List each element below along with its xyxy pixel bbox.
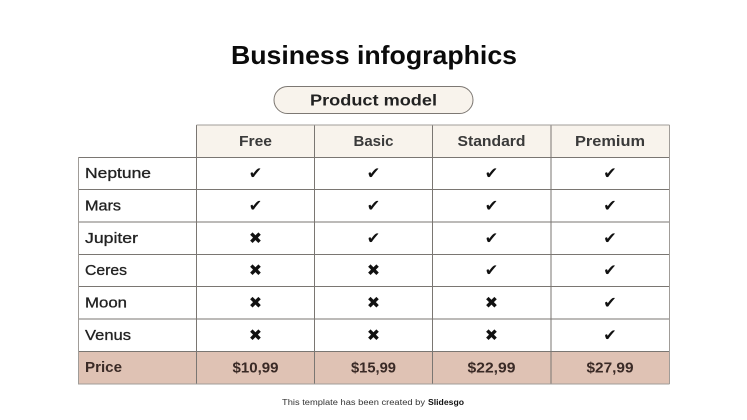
check and cross marks: ✔ bbox=[603, 228, 617, 248]
check and cross marks: ✖ bbox=[367, 326, 380, 344]
check and cross marks: ✖ bbox=[485, 293, 498, 312]
price row: $10,99 bbox=[232, 360, 278, 376]
footer credit: Slidesgo bbox=[428, 398, 464, 407]
pill: product model: Product model bbox=[310, 92, 437, 110]
title: Business infographics bbox=[231, 40, 517, 70]
footer credit bbox=[282, 398, 464, 407]
check and cross marks: ✔ bbox=[249, 196, 262, 215]
pill: product model bbox=[274, 86, 473, 114]
column headers: Premium bbox=[575, 133, 645, 150]
column headers: Basic bbox=[354, 133, 394, 150]
header row background bbox=[196, 125, 669, 157]
check and cross marks: ✔ bbox=[367, 164, 380, 182]
footer credit: This template has been created by bbox=[282, 398, 425, 407]
check and cross marks: ✔ bbox=[367, 196, 380, 215]
check and cross marks: ✔ bbox=[249, 164, 262, 182]
row labels: Ceres bbox=[85, 262, 127, 279]
column headers: Free bbox=[239, 133, 272, 150]
check and cross marks: ✖ bbox=[249, 326, 262, 344]
check and cross marks: ✔ bbox=[485, 196, 498, 215]
check and cross marks: ✔ bbox=[603, 326, 617, 344]
check and cross marks: ✔ bbox=[603, 164, 617, 182]
check and cross marks: ✔ bbox=[485, 164, 498, 182]
check and cross marks: ✔ bbox=[367, 228, 380, 248]
column headers: Standard bbox=[458, 133, 526, 150]
check and cross marks: ✔ bbox=[603, 293, 617, 312]
row labels: Jupiter bbox=[85, 230, 138, 247]
row labels: Venus bbox=[85, 327, 131, 344]
row labels bbox=[85, 165, 151, 344]
check and cross marks bbox=[249, 164, 617, 344]
price row bbox=[85, 359, 634, 376]
check and cross marks: ✖ bbox=[367, 260, 380, 280]
check and cross marks: ✖ bbox=[249, 293, 262, 312]
row labels: Mars bbox=[85, 198, 121, 214]
price row: $22,99 bbox=[468, 360, 516, 376]
price row: $15,99 bbox=[351, 360, 396, 376]
row labels: Neptune bbox=[85, 165, 151, 182]
check and cross marks: ✔ bbox=[485, 228, 498, 248]
column headers bbox=[239, 133, 645, 150]
check and cross marks: ✔ bbox=[603, 196, 617, 215]
price row background bbox=[78, 351, 669, 384]
comparison table bbox=[78, 125, 670, 384]
price row: Price bbox=[85, 359, 122, 376]
price row: $27,99 bbox=[586, 360, 634, 376]
check and cross marks: ✖ bbox=[367, 293, 380, 312]
check and cross marks: ✖ bbox=[249, 260, 262, 280]
row labels: Moon bbox=[85, 294, 127, 312]
check and cross marks: ✖ bbox=[485, 326, 498, 344]
check and cross marks: ✔ bbox=[485, 260, 498, 280]
check and cross marks: ✔ bbox=[603, 260, 617, 280]
check and cross marks: ✖ bbox=[249, 228, 262, 248]
